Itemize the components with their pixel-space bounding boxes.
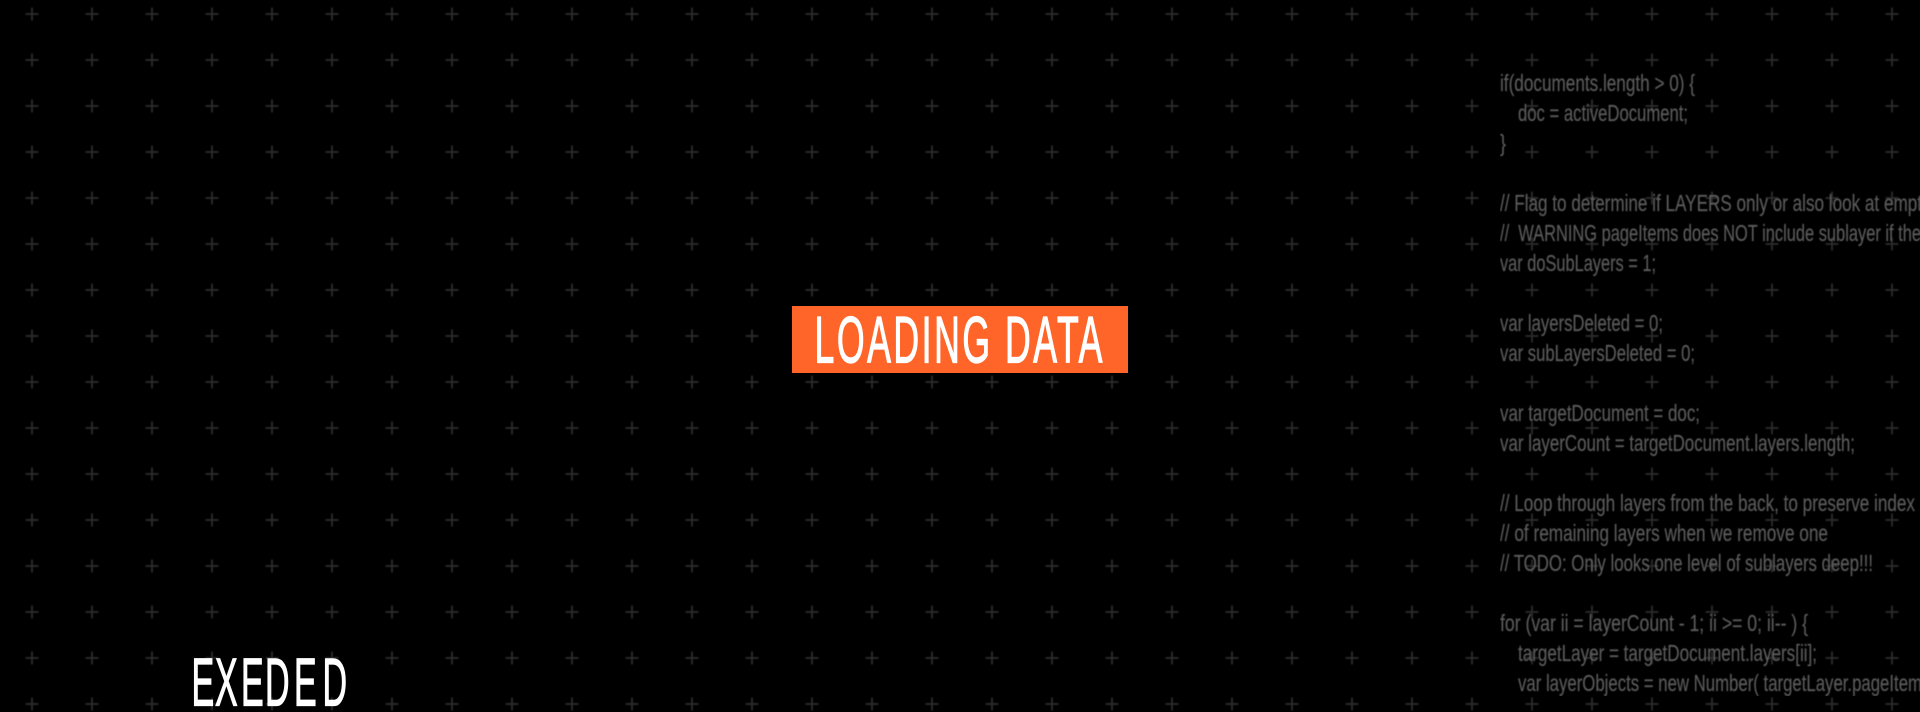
code: target document — [1500, 400, 1855, 456]
code: target document: var targetDocument = doc; — [1500, 400, 1700, 426]
code: document check — [1500, 70, 1695, 156]
code: for loop: for (var ii = layerCount - 1; ii >= 0; ii-- ) { — [1500, 610, 1808, 636]
code: for loop — [1500, 610, 1920, 696]
banner text: LOADING DATA — [814, 304, 1105, 377]
code: deletion counters: var subLayersDeleted = 0; — [1500, 340, 1695, 366]
code: for loop: targetLayer = targetDocument.layers[ii]; — [1518, 640, 1817, 666]
code: loop comment — [1500, 490, 1915, 576]
code: layer flag comment — [1500, 190, 1920, 276]
loading banner — [792, 304, 1128, 377]
panel: code listing — [1500, 70, 1920, 696]
banner background — [792, 306, 1128, 373]
code: document check: doc = activeDocument; — [1518, 100, 1688, 126]
code: document check: if(documents.length > 0) { — [1500, 70, 1695, 96]
code: deletion counters — [1500, 310, 1695, 366]
code: deletion counters: var layersDeleted = 0; — [1500, 310, 1663, 336]
code: document check: } — [1500, 130, 1506, 156]
code: layer flag comment: var doSubLayers = 1; — [1500, 250, 1656, 276]
